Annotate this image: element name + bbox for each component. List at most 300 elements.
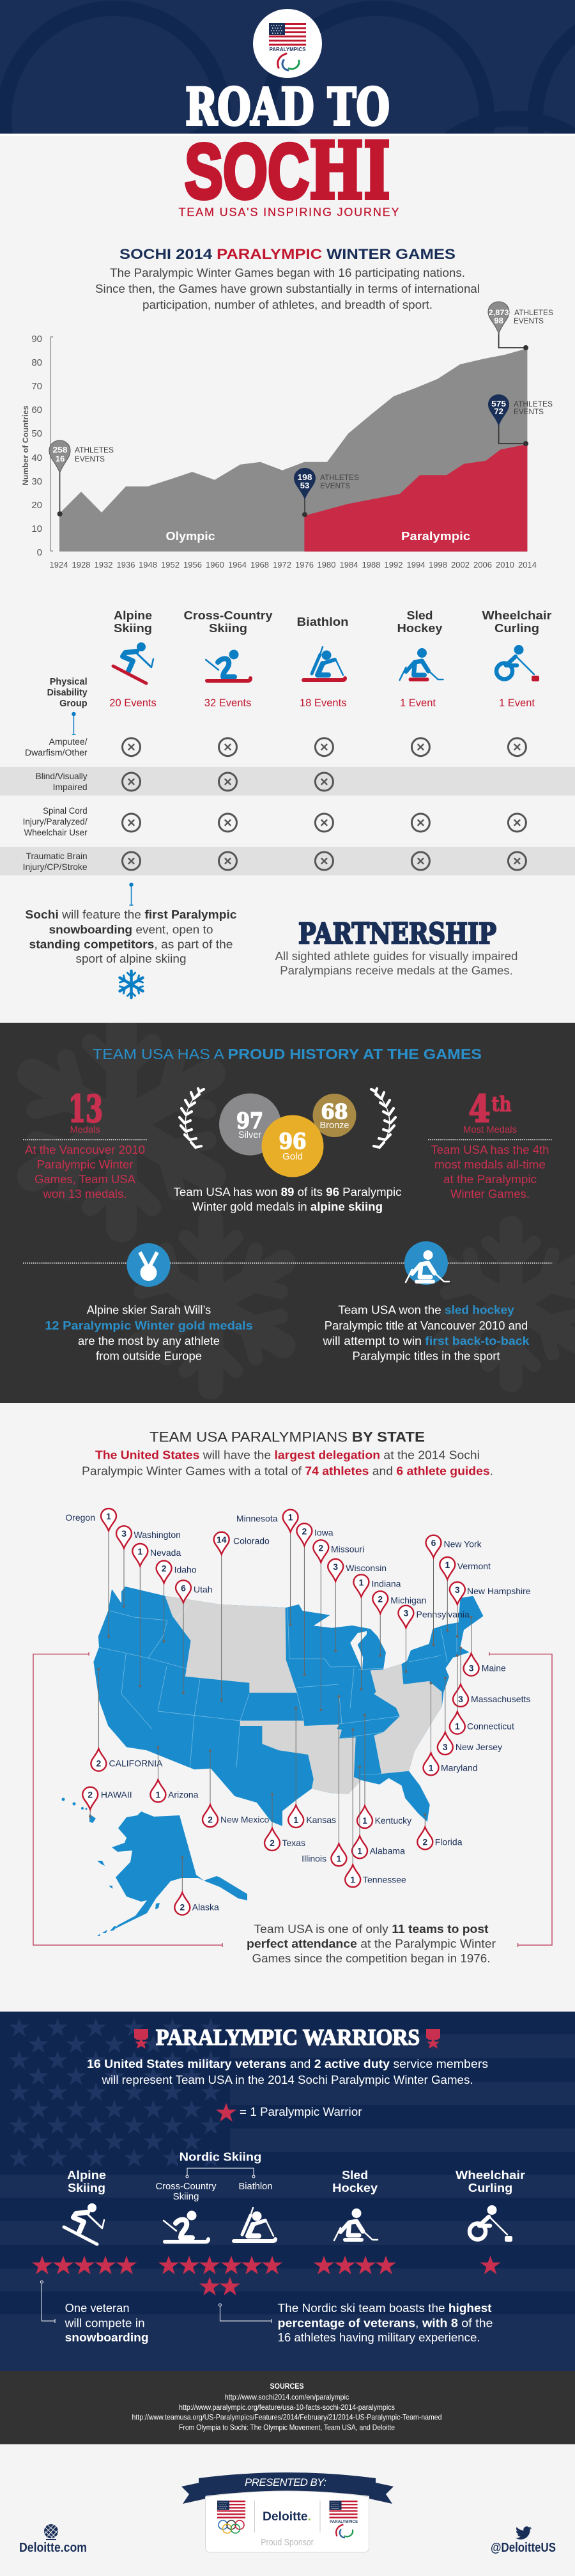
- pin: 1924: ATHLETES: [75, 446, 114, 454]
- panel: sources: http://www.paralympic.org/feature/usa-10-facts-sochi-2014-paralympics: [179, 2403, 395, 2412]
- pin: Nevada: Nevada: [150, 1548, 181, 1558]
- pin: Tennessee: 1: [350, 1874, 355, 1884]
- pin: Minnesota: Minnesota: [236, 1514, 278, 1524]
- row labels: Spinal Cord: [43, 806, 88, 816]
- x axis years: 1968: [250, 560, 269, 570]
- pin: Indiana: 1: [359, 1577, 364, 1587]
- sled hockey text: will attempt to win first back-to-back: [322, 1334, 530, 1347]
- pin: Nevada: [132, 1544, 181, 1688]
- event counts: 32 Events: [204, 697, 251, 709]
- pin: Kentucky: Kentucky: [375, 1815, 411, 1826]
- x axis years: 1998: [429, 560, 447, 570]
- pin: 2014 paralympic: ATHLETES: [514, 400, 553, 408]
- row labels: Traumatic Brain: [26, 851, 88, 861]
- sport headings: Curling: [468, 2182, 512, 2194]
- pin: Oregon: [65, 1509, 116, 1638]
- pin: New Jersey: [438, 1677, 502, 1755]
- pin: Tennessee: [345, 1728, 406, 1887]
- pin: Maine: Maine: [482, 1663, 506, 1673]
- laurels: [180, 1089, 395, 1149]
- pin: 1976: 53: [300, 481, 309, 490]
- column headers: Skiing: [209, 622, 247, 635]
- Sarah Will text: Alpine skier Sarah Will’s: [87, 1303, 211, 1317]
- intro text: 16 United States military veterans and 2 active duty service members: [87, 2057, 488, 2070]
- snowboarding callout: Sochi will feature the first Paralympic: [26, 908, 236, 921]
- icon: alpine skiing: [113, 642, 153, 683]
- pin: Maryland: Maryland: [441, 1762, 478, 1773]
- medal counts: Gold: [282, 1152, 303, 1162]
- y axis labels: 10: [31, 524, 42, 534]
- stat: 4th most medals: Team USA has the 4th: [431, 1143, 549, 1156]
- pin: Vermont: Vermont: [457, 1561, 491, 1571]
- pin: Idaho: 2: [162, 1563, 167, 1574]
- medal counts: [219, 1093, 356, 1177]
- panel: sources: SOURCES: [270, 2382, 304, 2391]
- stat: 13 medals: Medals: [70, 1124, 100, 1135]
- pin: New Mexico: New Mexico: [220, 1814, 269, 1824]
- pin: Utah: [176, 1580, 213, 1694]
- pin: Arizona: [150, 1746, 199, 1802]
- pin: Florida: 2: [422, 1836, 427, 1847]
- row group heading: Group: [59, 699, 88, 709]
- pin: Idaho: [157, 1561, 197, 1643]
- alpine gold text: Team USA has won 89 of its 96 Paralympic: [174, 1185, 401, 1199]
- pin: Connecticut: [450, 1654, 514, 1734]
- pin: Maine: 3: [469, 1663, 474, 1673]
- pin: Florida: [417, 1813, 463, 1849]
- pin: Iowa: Iowa: [314, 1527, 334, 1537]
- panel: sources: http://www.teamusa.org/US-Paralympics/Features/2014/February/21/2014-US-Paralympic-Team-named: [132, 2413, 442, 2422]
- column headers: Cross-Country: [184, 609, 272, 622]
- x axis years: 2014: [518, 560, 537, 570]
- pin: 1976: [294, 468, 359, 517]
- perfect attendance text: [247, 1922, 496, 1965]
- subtitle: TEAM USA'S INSPIRING JOURNEY: [179, 206, 399, 219]
- delegation text: The United States will have the largest delegation at the 2014 Sochi: [95, 1448, 480, 1461]
- column headers: Biathlon: [296, 616, 349, 628]
- logo: US Paralympics: PARALYMPICS: [270, 47, 306, 52]
- pin: New York: [425, 1535, 482, 1646]
- y axis labels: 30: [31, 476, 42, 487]
- icon: biathlon: [303, 647, 345, 680]
- pin: Iowa: 2: [302, 1526, 307, 1536]
- pin: 2014 olympic: EVENTS: [514, 316, 544, 325]
- deloitte.com: [19, 2524, 87, 2555]
- medal counts: 68: [321, 1099, 348, 1124]
- intro text: [87, 2057, 488, 2086]
- star legend: = 1 Paralympic Warrior: [240, 2105, 362, 2118]
- x axis years: 1992: [385, 560, 402, 570]
- pin: Kentucky: 1: [362, 1815, 367, 1826]
- event counts: 1 Event: [499, 697, 535, 709]
- pin: Wisconsin: 3: [333, 1562, 338, 1572]
- sports table: [0, 609, 575, 876]
- pin: Vermont: 1: [445, 1560, 450, 1570]
- title: Sochi: SOCHI: [185, 125, 390, 217]
- pin: Indiana: Indiana: [372, 1578, 401, 1588]
- pin: 2014 paralympic: 72: [494, 407, 503, 416]
- pin: Oregon: 1: [106, 1511, 111, 1521]
- pin: Texas: 2: [270, 1838, 275, 1848]
- pin: Iowa: [296, 1523, 334, 1676]
- bracket around map: [33, 1652, 552, 1947]
- panel: sources: http://www.sochi2014.com/en/paralympic: [225, 2393, 349, 2401]
- icon: cross-country skiing: [164, 2210, 208, 2242]
- nordic disciplines: [156, 2181, 272, 2202]
- row labels: Injury/CP/Stroke: [23, 862, 88, 872]
- pin: Texas: Texas: [282, 1838, 305, 1848]
- sponsor card: PARALYMPICS: [330, 2520, 358, 2524]
- pin: Kentucky: [357, 1714, 411, 1828]
- nordic disciplines: Skiing: [173, 2191, 199, 2202]
- Sarah Will text: are the most by any athlete: [78, 1334, 220, 1347]
- olympic area: [59, 348, 527, 552]
- stat: 4th most medals: th: [492, 1092, 511, 1116]
- perfect attendance text: Team USA is one of only 11 teams to post: [254, 1922, 488, 1936]
- flag: US Olympic: [217, 2501, 245, 2518]
- heading: TEAM USA HAS A PROUD HISTORY AT THE GAMES: [93, 1046, 482, 1062]
- ribbon: presented by: [181, 2472, 394, 2504]
- area chart: countries participating: [21, 302, 553, 570]
- partnership: Paralympians receive medals at the Games.: [280, 964, 513, 977]
- pin: Hawaii: [82, 1787, 132, 1818]
- panel: paralympic warriors: [0, 2012, 575, 2371]
- pin: New Jersey: New Jersey: [456, 1742, 502, 1752]
- map: United States: [61, 1587, 483, 1936]
- pin: 2014 olympic: 2,873: [489, 308, 509, 317]
- pin: Kansas: 1: [293, 1815, 298, 1825]
- pin: Pennsylvania: [398, 1606, 470, 1673]
- row labels: Blind/Visually: [36, 772, 88, 781]
- pin: Tennessee: Tennessee: [363, 1874, 406, 1884]
- icon: globe: [44, 2524, 58, 2540]
- pin: Pennsylvania: 3: [404, 1608, 409, 1618]
- row labels: Dwarfism/Other: [25, 748, 88, 757]
- column headers: Curling: [494, 622, 539, 635]
- pin: Massachusetts: Massachusetts: [471, 1694, 530, 1704]
- pin: Colorado: Colorado: [233, 1536, 270, 1546]
- delegation text: [82, 1448, 493, 1478]
- non-represented states: [165, 1596, 442, 1794]
- snowboarding callout: [26, 883, 236, 998]
- panel: proud history: [0, 1023, 575, 1403]
- intro text: [95, 266, 480, 311]
- pin: New Hampshire: New Hampshire: [467, 1586, 531, 1596]
- x axis years: 2002: [451, 560, 470, 570]
- x axis years: 1984: [340, 560, 358, 570]
- partnership: PARTNERSHIP: [298, 917, 496, 950]
- snowboarding callout: snowboarding event, open to: [49, 923, 213, 936]
- icon: snowflake: [120, 971, 143, 998]
- star legend: [216, 2103, 362, 2122]
- pin: Oregon: Oregon: [65, 1512, 95, 1523]
- pin: Kansas: [288, 1707, 336, 1827]
- pin: New Hampshire: 3: [455, 1585, 460, 1595]
- pin: Missouri: Missouri: [331, 1544, 364, 1554]
- icon: medal: [126, 1243, 170, 1287]
- column headers: Wheelchair: [482, 609, 552, 622]
- icon: sled hockey: [400, 648, 443, 680]
- sport headings: Wheelchair: [456, 2169, 525, 2182]
- y axis labels: 90: [31, 334, 42, 345]
- icon: sled hockey: [334, 2208, 378, 2240]
- icon: cross-country skiing: [206, 649, 250, 681]
- column headers: Hockey: [397, 622, 442, 635]
- area labels: Olympic: [166, 530, 215, 543]
- pin: New York: 6: [431, 1538, 436, 1548]
- state pins: [65, 1509, 531, 1915]
- pin: Massachusetts: 3: [458, 1694, 463, 1704]
- x axis years: 1936: [117, 560, 135, 570]
- pin: Kansas: Kansas: [306, 1815, 336, 1825]
- deloitte twitter: [491, 2526, 556, 2555]
- y axis labels: 50: [31, 428, 42, 439]
- icon: wheelchair curling: [470, 2205, 512, 2242]
- hawaii: [89, 1814, 96, 1823]
- sled hockey text: Paralympic title at Vancouver 2010 and: [325, 1319, 528, 1332]
- pin: 2014 paralympic: 575: [491, 399, 506, 408]
- title: Road to: ROAD TO: [185, 77, 390, 137]
- stat: 13 medals: Paralympic Winter: [37, 1158, 134, 1171]
- stat: 13 medals: Games, Team USA: [34, 1172, 136, 1186]
- pin: 2014 paralympic: [488, 394, 553, 446]
- snowboarding note: [65, 2301, 149, 2344]
- sport headings: Skiing: [68, 2182, 105, 2194]
- intro text: will represent Team USA in the 2014 Sochi Paralympic Winter Games.: [101, 2073, 473, 2086]
- partnership: All sighted athlete guides for visually impaired: [275, 949, 518, 963]
- pin: Washington: Washington: [134, 1530, 181, 1540]
- ribbon: presented by: PRESENTED BY:: [245, 2476, 326, 2488]
- nordic disciplines: Cross-Country: [156, 2181, 217, 2192]
- stat: 4th most medals: 4: [469, 1087, 491, 1131]
- x axis years: 1976: [295, 560, 314, 570]
- flag: US Paralympic: [330, 2501, 358, 2518]
- pin: Wisconsin: [328, 1559, 387, 1652]
- pin: 1976: ATHLETES: [320, 473, 359, 482]
- pin: Illinois: Illinois: [302, 1853, 326, 1863]
- eligibility marks: [123, 738, 526, 870]
- pin: California: CALIFORNIA: [109, 1758, 163, 1769]
- y axis labels: 40: [31, 453, 42, 463]
- pin: 1924: [49, 440, 114, 516]
- pin: Minnesota: 1: [288, 1512, 293, 1523]
- x axis years: 1994: [407, 560, 425, 570]
- x axis years: 1956: [183, 560, 202, 570]
- column headers: Skiing: [114, 622, 152, 635]
- snowboarding callout: standing competitors , as part of the: [29, 937, 233, 951]
- sport headings: Nordic Skiing: [180, 2151, 261, 2164]
- pin: New Jersey: 3: [443, 1742, 448, 1752]
- row group heading: [47, 677, 88, 709]
- row group heading: Disability: [47, 688, 88, 698]
- stat: 13 medals: [23, 1087, 148, 1200]
- intro text: participation, number of athletes, and breadth of sport.: [142, 298, 433, 311]
- event counts: [109, 697, 535, 709]
- snowboarding callout: sport of alpine skiing: [75, 952, 187, 965]
- stat: 4th most medals: Winter Games.: [450, 1187, 530, 1200]
- x axis years: [50, 560, 537, 570]
- event counts: 1 Event: [400, 697, 436, 709]
- pin: Vermont: [440, 1557, 491, 1632]
- pin: 2014 olympic: [488, 302, 553, 350]
- pin: Florida: Florida: [435, 1836, 463, 1847]
- pin: Indiana: [353, 1574, 401, 1691]
- icon: biathlon: [234, 2208, 275, 2241]
- pin: Illinois: [302, 1695, 346, 1866]
- x axis years: 2010: [496, 560, 514, 570]
- pin: Alaska: Alaska: [192, 1902, 219, 1913]
- pin: Hawaii: 2: [88, 1790, 93, 1800]
- pin: Colorado: 14: [217, 1535, 227, 1545]
- table row bands: [0, 767, 575, 876]
- pin: Illinois: 1: [337, 1853, 342, 1863]
- pin: Connecticut: 1: [455, 1721, 460, 1732]
- row labels: Amputee/: [49, 737, 88, 747]
- pin: Washington: 3: [121, 1528, 126, 1539]
- pin: Arizona: Arizona: [168, 1789, 199, 1799]
- header banner: [0, 0, 575, 136]
- row labels: Injury/Paralyzed/: [23, 817, 88, 826]
- row group heading: Physical: [50, 677, 88, 687]
- olympic rings: [218, 2520, 244, 2533]
- pin: California: [91, 1668, 163, 1771]
- pin: 1924: 258: [52, 445, 68, 454]
- x axis years: 2006: [473, 560, 492, 570]
- pin: Connecticut: Connecticut: [467, 1721, 514, 1732]
- pin: Hawaii: HAWAII: [101, 1790, 132, 1800]
- section heading: Sochi 2014 Paralympic Winter Games: SOCHI 2014 PARALYMPIC WINTER GAMES: [119, 246, 456, 262]
- x axis years: 1952: [161, 560, 180, 570]
- medal counts: 96: [279, 1129, 307, 1154]
- sport headings: Alpine: [67, 2169, 106, 2182]
- pin: 1976: EVENTS: [320, 481, 350, 490]
- Sarah Will text: [45, 1303, 253, 1363]
- pin: 2014 olympic: 98: [494, 316, 503, 325]
- intro text: Since then, the Games have grown substantially in terms of international: [95, 282, 480, 295]
- pin: Michigan: [372, 1591, 426, 1657]
- pin: 2014 olympic: ATHLETES: [514, 308, 553, 317]
- heading: paralympic warriors: PARALYMPIC WARRIORS: [156, 2024, 420, 2050]
- pin: Wisconsin: Wisconsin: [346, 1563, 387, 1573]
- sled hockey text: Team USA won the sled hockey: [338, 1303, 514, 1317]
- x axis years: 1988: [362, 560, 380, 570]
- y axis labels: 80: [31, 357, 42, 368]
- nordic note: [277, 2301, 493, 2344]
- deloitte.com: Deloitte.com: [19, 2541, 87, 2555]
- x axis years: 1964: [228, 560, 247, 570]
- row labels: Impaired: [53, 782, 88, 792]
- x axis years: 1948: [139, 560, 157, 570]
- warrior stars: [32, 2256, 501, 2295]
- pin: 1924: 16: [56, 454, 65, 463]
- pin: 1924: EVENTS: [75, 454, 105, 463]
- sponsor card: Proud Sponsor: [261, 2537, 314, 2548]
- pin: New Hampshire: [450, 1582, 531, 1638]
- medal counts: Silver: [238, 1130, 261, 1140]
- intro text: The Paralympic Winter Games began with 16 participating nations.: [110, 266, 465, 279]
- nordic note: 16 athletes having military experience.: [277, 2331, 480, 2344]
- stat: 13 medals: At the Vancouver 2010: [25, 1143, 145, 1156]
- panel: sources: From Olympia to Sochi: The Olympic Movement, Team USA, and Deloitte: [179, 2423, 395, 2432]
- stat: 4th most medals: most medals all-time: [434, 1158, 546, 1171]
- alpine gold text: Winter gold medals in alpine skiing: [192, 1200, 383, 1213]
- pin: Alabama: [352, 1765, 405, 1858]
- x axis years: 1924: [50, 560, 68, 570]
- pin: Alabama: Alabama: [370, 1845, 405, 1856]
- pin: Alabama: 1: [357, 1845, 362, 1856]
- row labels: Wheelchair User: [24, 828, 88, 837]
- sled hockey text: [322, 1303, 530, 1363]
- deloitte twitter: @DeloitteUS: [491, 2541, 556, 2555]
- pin: Maine: [464, 1616, 506, 1676]
- x axis years: 1928: [72, 560, 90, 570]
- deloitte wordmark: Deloitte.: [263, 2510, 311, 2524]
- sport headings: Sled: [342, 2169, 368, 2182]
- stat: 4th most medals: [428, 1087, 553, 1200]
- sponsor card: [206, 2491, 369, 2552]
- icon: wheelchair curling: [496, 645, 539, 681]
- medal counts: Bronze: [319, 1121, 349, 1131]
- pin: Utah: 6: [181, 1583, 186, 1593]
- pin: Arizona: 1: [156, 1789, 161, 1799]
- pin: New Mexico: [203, 1750, 269, 1827]
- x axis years: 1980: [318, 560, 335, 570]
- column headers: Alpine: [114, 609, 152, 622]
- pin: Michigan: Michigan: [390, 1595, 426, 1605]
- pin: California: 2: [96, 1758, 102, 1769]
- pin: Missouri: [313, 1540, 364, 1711]
- Sarah Will text: 12 Paralympic Winter gold medals: [45, 1319, 253, 1332]
- pin: Maryland: [423, 1682, 478, 1775]
- pin: Michigan: 2: [378, 1594, 383, 1604]
- panel: sources: [0, 2371, 575, 2444]
- perfect attendance text: Games since the competition began in 1976.: [252, 1951, 491, 1965]
- partnership: [275, 917, 518, 977]
- pin: New Mexico: 2: [208, 1814, 213, 1824]
- delegation text: Paralympic Winter Games with a total of 74 athletes and 6 athlete guides .: [82, 1464, 493, 1478]
- logo: US Paralympics: [253, 9, 322, 78]
- icon: alpine skiing: [64, 2203, 104, 2244]
- pin: Minnesota: [236, 1510, 298, 1626]
- pin: Colorado: [214, 1532, 270, 1702]
- Sarah Will text: from outside Europe: [96, 1349, 202, 1363]
- pin: Nevada: 1: [137, 1546, 142, 1556]
- callout connectors: [40, 2281, 272, 2323]
- contiguous states: [93, 1587, 483, 1826]
- pin: New York: New York: [443, 1539, 482, 1549]
- pin: Washington: [116, 1526, 181, 1608]
- alaska: [112, 1812, 247, 1928]
- nordic disciplines: Biathlon: [239, 2181, 272, 2192]
- paralympic area: [304, 444, 527, 552]
- pin: Texas: [264, 1793, 305, 1851]
- icon: twitter bird: [516, 2526, 532, 2540]
- column headers: Sled: [406, 609, 433, 622]
- y axis labels: 70: [31, 381, 42, 392]
- sport headings: [67, 2151, 525, 2194]
- x axis years: 1960: [206, 560, 224, 570]
- y axis labels: 0: [37, 547, 42, 558]
- x axis years: 1972: [273, 560, 291, 570]
- stat: 4th most medals: at the Paralympic: [443, 1172, 537, 1186]
- snowboarding note: One veteran: [65, 2301, 130, 2315]
- event counts: 20 Events: [109, 697, 157, 709]
- pin: Maryland: 1: [429, 1762, 434, 1773]
- y axis labels: [31, 334, 42, 558]
- section heading: by state: TEAM USA PARALYMPIANS BY STATE: [150, 1429, 425, 1445]
- medal counts: 97: [236, 1108, 263, 1134]
- pin: 1976: 198: [298, 472, 312, 482]
